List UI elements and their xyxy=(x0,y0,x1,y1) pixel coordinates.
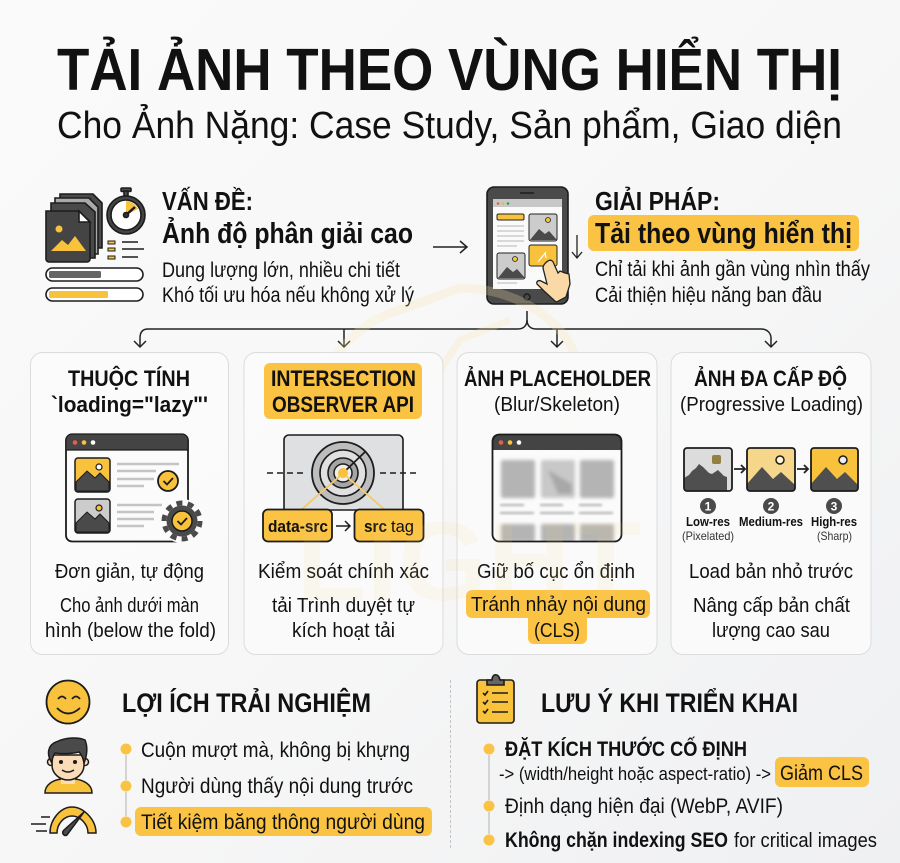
panel: progressive loading xyxy=(671,352,871,654)
text: card 3 description xyxy=(466,560,650,644)
watermark: faint logo xyxy=(322,288,581,478)
step labels: (Sharp) xyxy=(817,529,852,543)
text block: problem: VẤN ĐỀ: xyxy=(162,186,253,216)
text: card 1 description: hình (below the fold) xyxy=(45,619,216,642)
heading: card 1: THUỘC TÍNH xyxy=(68,366,190,391)
heading: card 1: `loading="lazy"' xyxy=(51,392,208,417)
heading: card 3: ẢNH PLACEHOLDER xyxy=(464,366,651,391)
icon: clipboard checklist xyxy=(477,675,514,723)
icon: medium-res thumbnail xyxy=(747,448,795,491)
heading: card 4 xyxy=(680,366,863,416)
text: card 2 description: kích hoạt tải xyxy=(292,619,395,642)
heading: card 2: OBSERVER API xyxy=(272,392,414,417)
title: Cho Ảnh Nặng: Case Study, Sản phẩm, Giao diện xyxy=(57,103,842,147)
list: benefits: Cuộn mượt mà, không bị khựng xyxy=(141,739,410,762)
list: implementation notes: ĐẶT KÍCH THƯỚC CỐ ĐỊNH xyxy=(505,737,747,761)
icon: blurred skeleton window xyxy=(492,434,622,542)
text block: problem: Ảnh độ phân giải cao xyxy=(162,216,413,250)
heading: card 3: (Blur/Skeleton) xyxy=(494,393,620,416)
icon: low-res thumbnail xyxy=(684,448,732,491)
label: src tag: src xyxy=(364,517,387,536)
step numbers: 2 xyxy=(768,500,775,514)
heading: card 3 xyxy=(464,366,651,416)
text: card 1 description: Đơn giản, tự động xyxy=(55,560,204,583)
arrow: problem to solution xyxy=(433,241,467,253)
list: benefits: Người dùng thấy nội dung trước xyxy=(141,775,413,798)
icon: user xyxy=(45,738,92,793)
text: card 3 description: Tránh nhảy nội dung xyxy=(471,593,646,616)
text block: problem xyxy=(162,186,414,307)
panel: intersection observer xyxy=(244,352,443,654)
text block: problem: Khó tối ưu hóa nếu không xử lý xyxy=(162,284,414,307)
icon: radar viewport xyxy=(263,435,424,542)
text: card 3 description: (CLS) xyxy=(534,619,580,642)
text block: solution: GIẢI PHÁP: xyxy=(595,186,720,216)
heading: card 2: INTERSECTION xyxy=(271,366,416,391)
panel: placeholder xyxy=(457,352,657,654)
text block: solution: Tải theo vùng hiển thị xyxy=(595,218,852,250)
icon: high-res thumbnail xyxy=(811,448,858,491)
text: card 4 description xyxy=(689,560,853,642)
heading: card 2 xyxy=(264,363,422,419)
heading: card 4: (Progressive Loading) xyxy=(680,393,863,416)
watermark: faint LIGHT lettering: LIGHT xyxy=(296,499,641,624)
heading: benefits: LỢI ÍCH TRẢI NGHIỆM xyxy=(122,686,371,718)
list: benefits xyxy=(120,739,432,836)
list: implementation notes xyxy=(484,737,877,852)
text: card 4 description: Nâng cấp bản chất xyxy=(693,594,850,617)
text: card 1 description: Cho ảnh dưới màn xyxy=(60,594,199,617)
list: implementation notes: -> (width/height hoặc aspect-ratio) -> xyxy=(499,764,771,784)
icon: heavy image files with stopwatch xyxy=(46,188,145,301)
text: card 2 description: tải Trình duyệt tự xyxy=(272,594,415,617)
label: src tag xyxy=(364,517,414,536)
list: implementation notes: Không chặn indexing SEO xyxy=(505,829,728,852)
step labels: (Pixelated) xyxy=(682,529,734,543)
arrow: scroll down xyxy=(572,235,582,258)
step labels xyxy=(682,515,857,543)
text: card 3 description: Giữ bố cục ổn định xyxy=(477,560,635,583)
icon: speed gauge xyxy=(31,807,96,836)
step numbers: 3 xyxy=(831,500,838,514)
heading: card 4: ẢNH ĐA CẤP ĐỘ xyxy=(694,366,847,391)
text block: solution: Cải thiện hiệu năng ban đầu xyxy=(595,284,822,307)
step labels: Medium-res xyxy=(739,515,803,529)
label: src tag: tag xyxy=(391,517,414,536)
list: benefits: Tiết kiệm băng thông người dùng xyxy=(141,811,425,834)
arrow: low to medium xyxy=(734,465,745,473)
list: implementation notes: Định dạng hiện đại (WebP, AVIF) xyxy=(505,795,783,818)
text: card 4 description: Load bản nhỏ trước xyxy=(689,560,853,583)
step numbers xyxy=(700,498,842,514)
icon: tablet with hand xyxy=(487,187,570,304)
heading: notes: LƯU Ý KHI TRIỂN KHAI xyxy=(541,687,798,718)
step numbers: 1 xyxy=(705,500,712,514)
arrows: branching connector xyxy=(134,311,777,347)
text block: solution xyxy=(588,186,870,307)
text: card 2 description xyxy=(258,560,429,642)
step labels: Low-res xyxy=(686,515,730,529)
list: implementation notes: for critical images xyxy=(734,830,877,852)
step labels: High-res xyxy=(811,515,857,529)
arrow: medium to high xyxy=(797,465,808,473)
title xyxy=(57,36,842,147)
heading: card 1 xyxy=(51,366,208,417)
panel: lazy attribute xyxy=(30,352,228,654)
icon: smile xyxy=(46,680,90,724)
list: implementation notes: Giảm CLS xyxy=(780,762,863,785)
text block: problem: Dung lượng lớn, nhiều chi tiết xyxy=(162,259,400,282)
text: card 2 description: Kiểm soát chính xác xyxy=(258,560,429,583)
label: data-src: data-src xyxy=(268,517,328,536)
text: card 4 description: lượng cao sau xyxy=(712,619,830,642)
icon: browser with gear xyxy=(66,434,204,543)
text: card 1 description xyxy=(45,560,216,642)
